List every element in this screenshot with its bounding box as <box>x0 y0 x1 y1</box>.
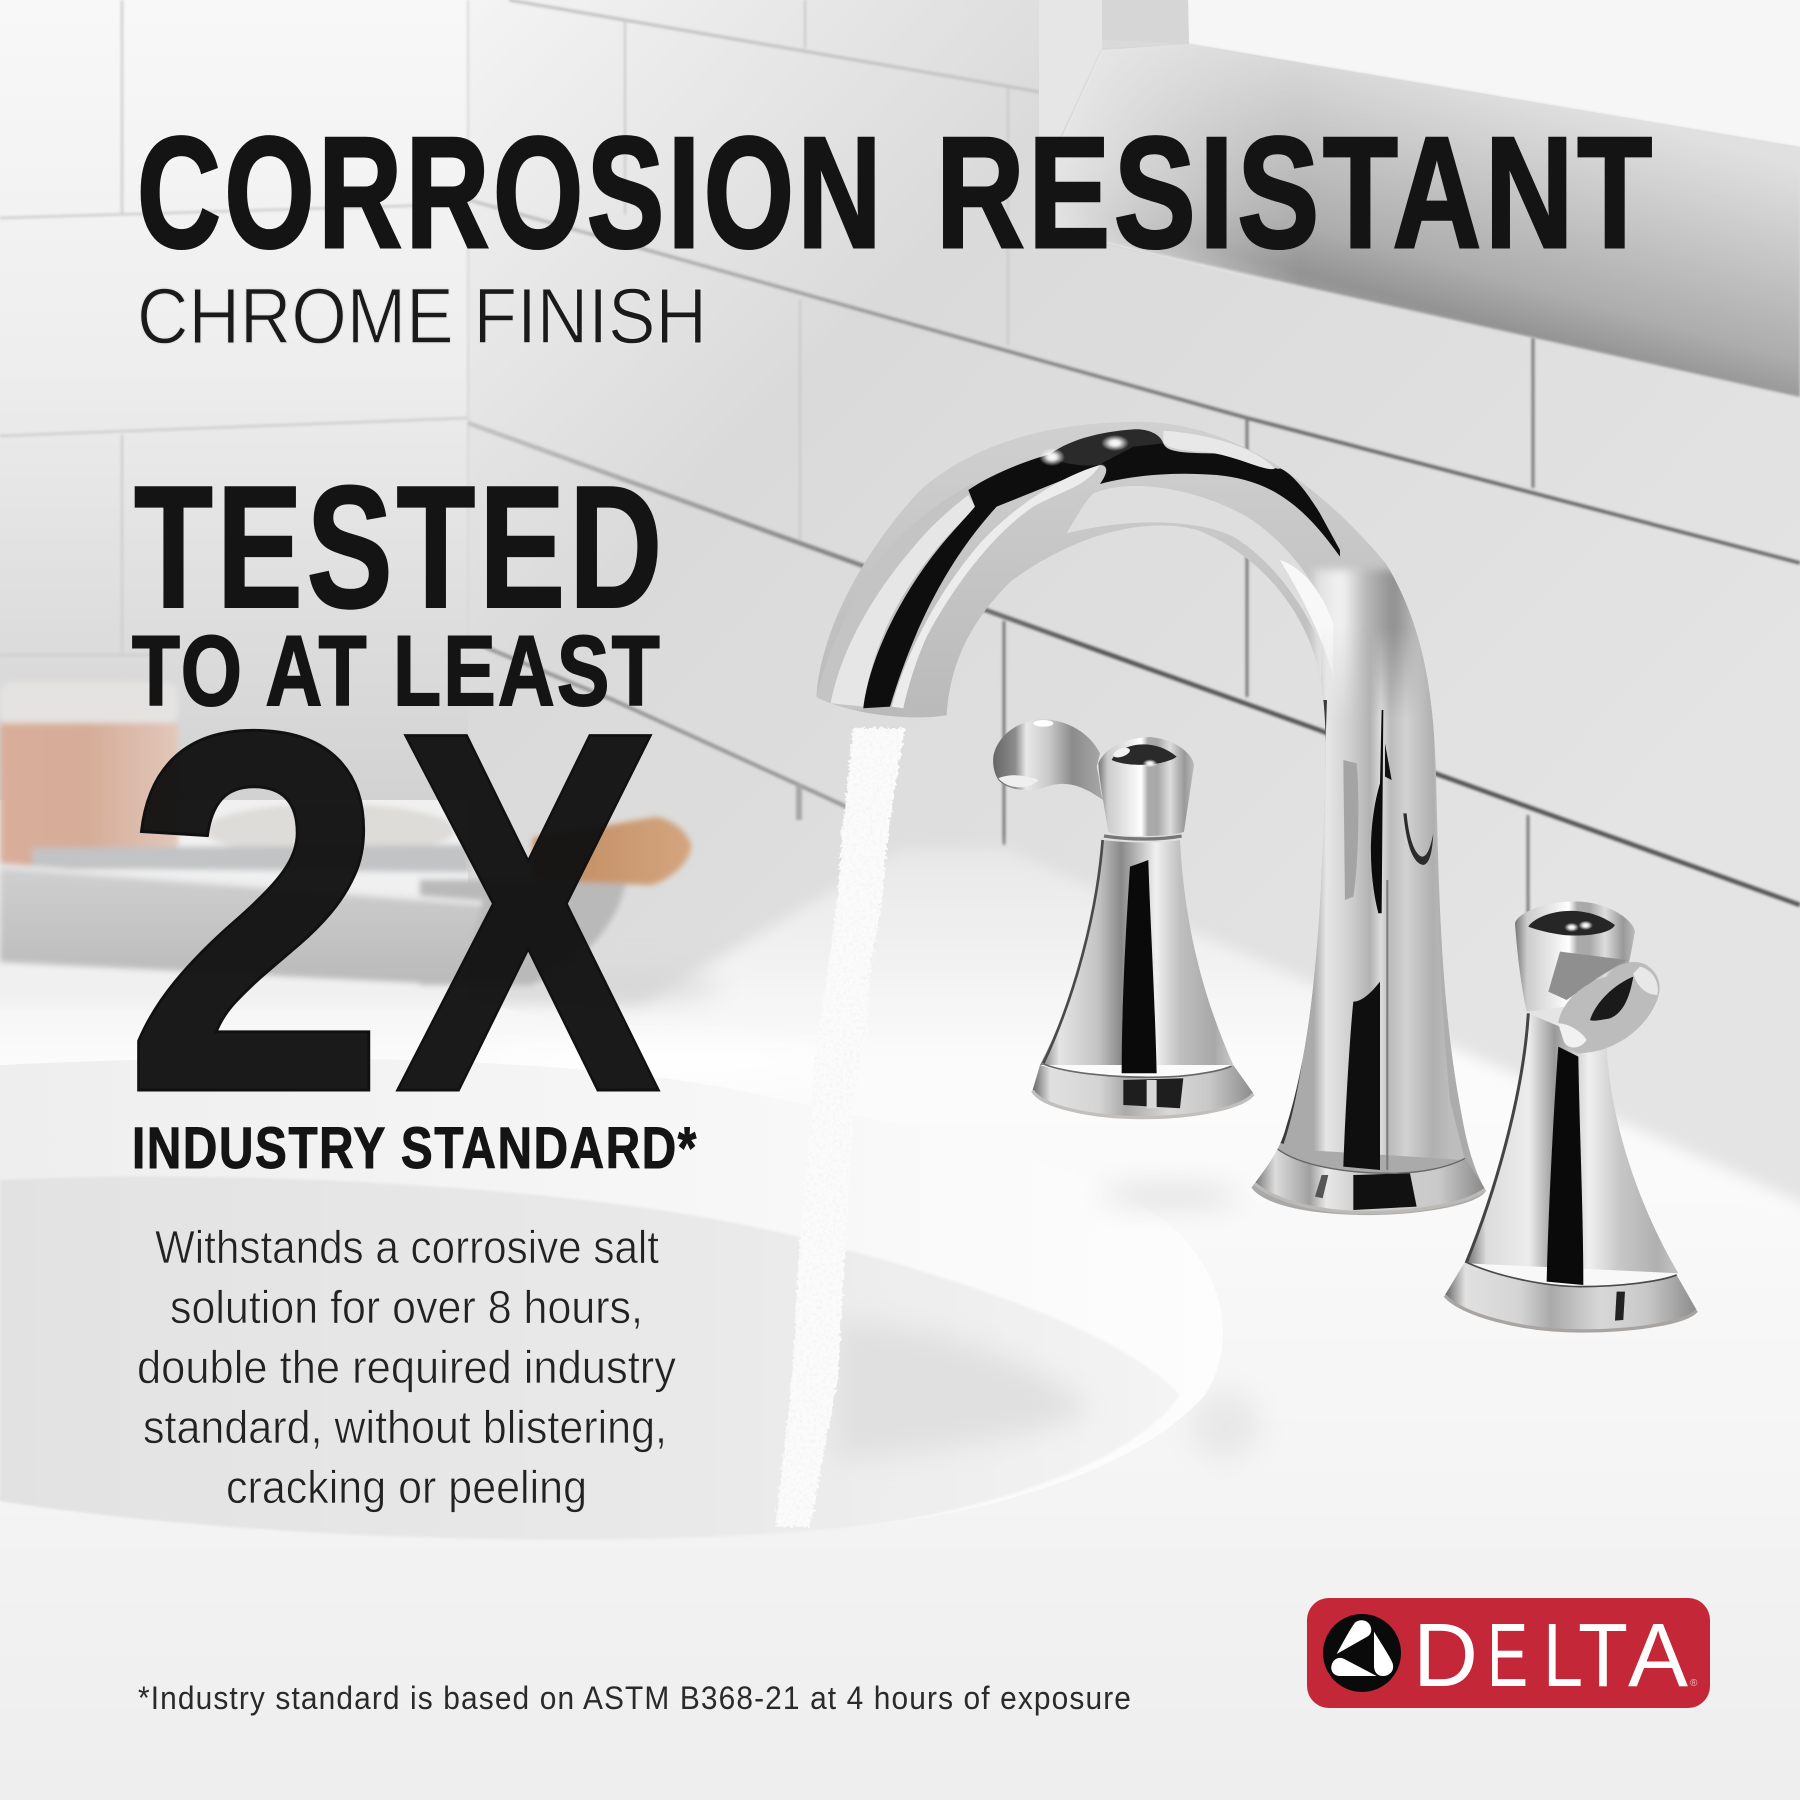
bowl right <box>420 880 626 985</box>
column reflections <box>1252 623 1485 1213</box>
delta logo <box>1307 1598 1710 1708</box>
base <box>1033 1065 1253 1117</box>
tray shadow <box>560 973 720 997</box>
body text <box>137 1221 676 1513</box>
headline to at least: TO AT LEAST <box>132 615 662 726</box>
base <box>1445 1262 1697 1330</box>
body text: double the required industry <box>137 1341 676 1393</box>
logo wordmark: A <box>1628 1606 1688 1706</box>
tray edge <box>0 866 482 903</box>
sink bowl <box>0 1177 1180 1540</box>
title: CORROSION <box>137 105 885 281</box>
lever <box>993 719 1103 800</box>
background items blurred <box>0 682 691 985</box>
background wall right <box>468 0 1800 1300</box>
tray <box>0 866 482 985</box>
logo mark <box>1323 1614 1401 1692</box>
window sill fade <box>1051 44 1300 290</box>
body text: standard, without blistering, <box>143 1401 667 1453</box>
spout reflections <box>813 429 1340 710</box>
body text: Withstands a corrosive salt <box>155 1221 659 1273</box>
window sill band <box>1051 44 1800 397</box>
plate <box>205 804 455 856</box>
upper column shading <box>1310 566 1432 715</box>
logo wordmark: E <box>1487 1606 1528 1706</box>
body <box>1040 840 1233 1065</box>
headline tested: TESTED <box>134 449 666 644</box>
water stream <box>775 728 905 1527</box>
left handle <box>993 719 1253 1118</box>
right handle <box>1445 902 1697 1331</box>
sink bowl shadow <box>835 1320 1090 1460</box>
body text: cracking or peeling <box>226 1461 587 1513</box>
logo wordmark: D <box>1413 1606 1478 1706</box>
small dish <box>32 845 470 872</box>
window frame vertical <box>1039 0 1102 230</box>
faucet <box>813 422 1697 1331</box>
brush <box>533 817 691 885</box>
tile grout lines <box>0 0 1800 920</box>
logo wordmark: T <box>1578 1606 1628 1706</box>
big 2X: X <box>394 625 664 1200</box>
window frame top <box>1102 0 1189 44</box>
body text: solution for over 8 hours, <box>170 1281 643 1333</box>
footnote: *Industry standard is based on ASTM B368-21 at 4 hours of exposure <box>138 1680 1132 1716</box>
sink outer rim <box>0 1058 1223 1540</box>
background wall left <box>0 0 470 800</box>
big 2X: 2 <box>122 625 388 1200</box>
registered mark: ® <box>1690 1678 1698 1689</box>
body <box>1465 1013 1678 1273</box>
logo wordmark: L <box>1543 1606 1583 1706</box>
counter highlight <box>480 1046 840 1078</box>
jar <box>0 682 178 869</box>
logo wordmark <box>1413 1606 1688 1706</box>
cap <box>1098 737 1194 836</box>
sink outer shadow <box>1190 1390 1260 1460</box>
window glass <box>1188 0 1800 147</box>
counter shadow <box>1100 1186 1240 1206</box>
counter top <box>0 848 1800 1800</box>
subtitle: CHROME FINISH <box>137 271 707 360</box>
spout <box>813 422 1486 1215</box>
cap <box>1515 902 1635 1012</box>
lever <box>1558 962 1660 1053</box>
industry standard: INDUSTRY STANDARD* <box>132 1116 698 1181</box>
connector plate <box>1548 952 1627 1000</box>
title <box>137 105 1656 281</box>
big 2X <box>122 625 664 1200</box>
